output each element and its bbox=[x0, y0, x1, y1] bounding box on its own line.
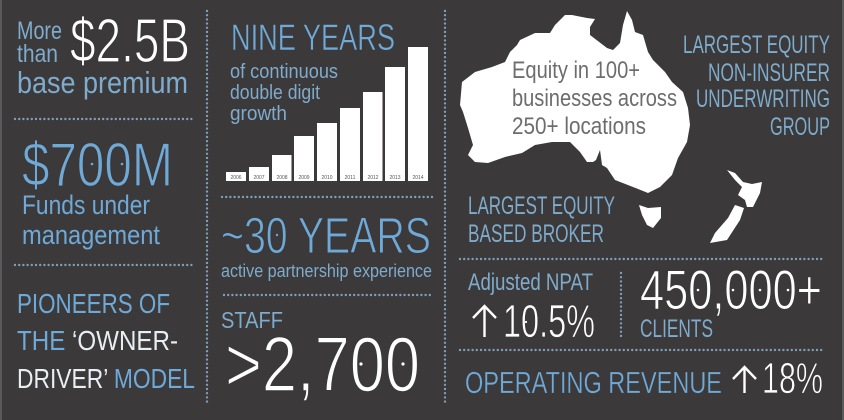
label: adjusted NPAT: Adjusted NPAT bbox=[468, 269, 593, 296]
text: largest equity based broker: LARGEST EQUITY bbox=[468, 192, 615, 220]
panel: nine years growth bbox=[226, 17, 428, 181]
text: continuous double digit growth: double digit bbox=[230, 82, 320, 104]
label: clients: CLIENTS bbox=[640, 315, 713, 343]
figure: $2.5B: $2.5B bbox=[70, 7, 190, 76]
panel: adjusted NPAT bbox=[468, 269, 595, 347]
icon: up arrow bbox=[733, 367, 756, 393]
text: largest equity non-insurer underwriting group bbox=[683, 31, 830, 141]
bar chart: growth 2006 to 2014: 2014 bbox=[412, 175, 424, 181]
panel: partnership experience bbox=[221, 207, 432, 281]
text: largest equity based broker: BASED BROKER bbox=[468, 220, 604, 248]
bar chart: growth 2006 to 2014 bbox=[226, 47, 428, 181]
label: more than bbox=[17, 17, 62, 68]
label: more than: More bbox=[17, 17, 62, 45]
bar chart: growth 2006 to 2014: 2007 bbox=[253, 175, 265, 181]
label: active partnership experience: active partnership experience bbox=[221, 261, 432, 281]
panel: base premium bbox=[17, 7, 190, 100]
bar chart: growth 2006 to 2014: 2010 bbox=[321, 175, 333, 181]
panel: pioneers of the owner-driver model: THE ‘OWNER- bbox=[17, 325, 178, 356]
text: continuous double digit growth: growth bbox=[230, 103, 287, 125]
bar chart: growth 2006 to 2014: 2012 bbox=[367, 175, 379, 181]
panel: pioneers of the owner-driver model: DRIVER’ MODEL bbox=[17, 363, 195, 394]
bar chart: growth 2006 to 2014: 2011 bbox=[345, 175, 356, 181]
bar chart: growth 2006 to 2014: 2008 bbox=[276, 175, 288, 181]
text: largest equity based broker bbox=[468, 192, 615, 248]
label: staff: STAFF bbox=[221, 307, 283, 333]
panel: funds under management bbox=[22, 131, 173, 250]
label: funds under management: management bbox=[22, 220, 160, 250]
panel: pioneers of the owner-driver model: PIONEERS OF bbox=[17, 288, 170, 319]
text: equity in businesses: 250+ locations bbox=[512, 113, 646, 140]
label: funds under management bbox=[22, 190, 160, 250]
label: funds under management: Funds under bbox=[22, 190, 150, 220]
figure: 30 years: ~30 YEARS bbox=[221, 207, 431, 264]
heading: nine years: NINE YEARS bbox=[231, 17, 395, 58]
panel: clients bbox=[640, 258, 822, 343]
bar chart: growth 2006 to 2014: 2009 bbox=[298, 175, 310, 181]
panel: operating revenue bbox=[465, 354, 823, 403]
label: more than: than bbox=[17, 40, 58, 68]
figure: 10.5%: 10.5% bbox=[503, 295, 595, 347]
label: base premium: base premium bbox=[17, 65, 188, 100]
icon: up arrow bbox=[473, 306, 496, 337]
text: continuous double digit growth: of continuous bbox=[230, 61, 338, 83]
panel: staff bbox=[221, 307, 420, 408]
figure: $700M: $700M bbox=[22, 131, 173, 200]
text: equity in businesses: businesses across bbox=[512, 85, 677, 112]
figure: more than 2,700: >2,700 bbox=[225, 320, 420, 408]
text: equity in businesses bbox=[512, 57, 677, 140]
text: equity in businesses: Equity in 100+ bbox=[512, 57, 640, 84]
panel: pioneers of the owner-driver model bbox=[17, 288, 195, 394]
label: operating revenue: OPERATING REVENUE bbox=[465, 365, 722, 400]
bar chart: growth 2006 to 2014: 2013 bbox=[389, 175, 401, 181]
text: continuous double digit growth bbox=[230, 61, 338, 125]
bar chart: growth 2006 to 2014: 2006 bbox=[230, 175, 242, 181]
map: Australia and New Zealand bbox=[460, 11, 762, 243]
